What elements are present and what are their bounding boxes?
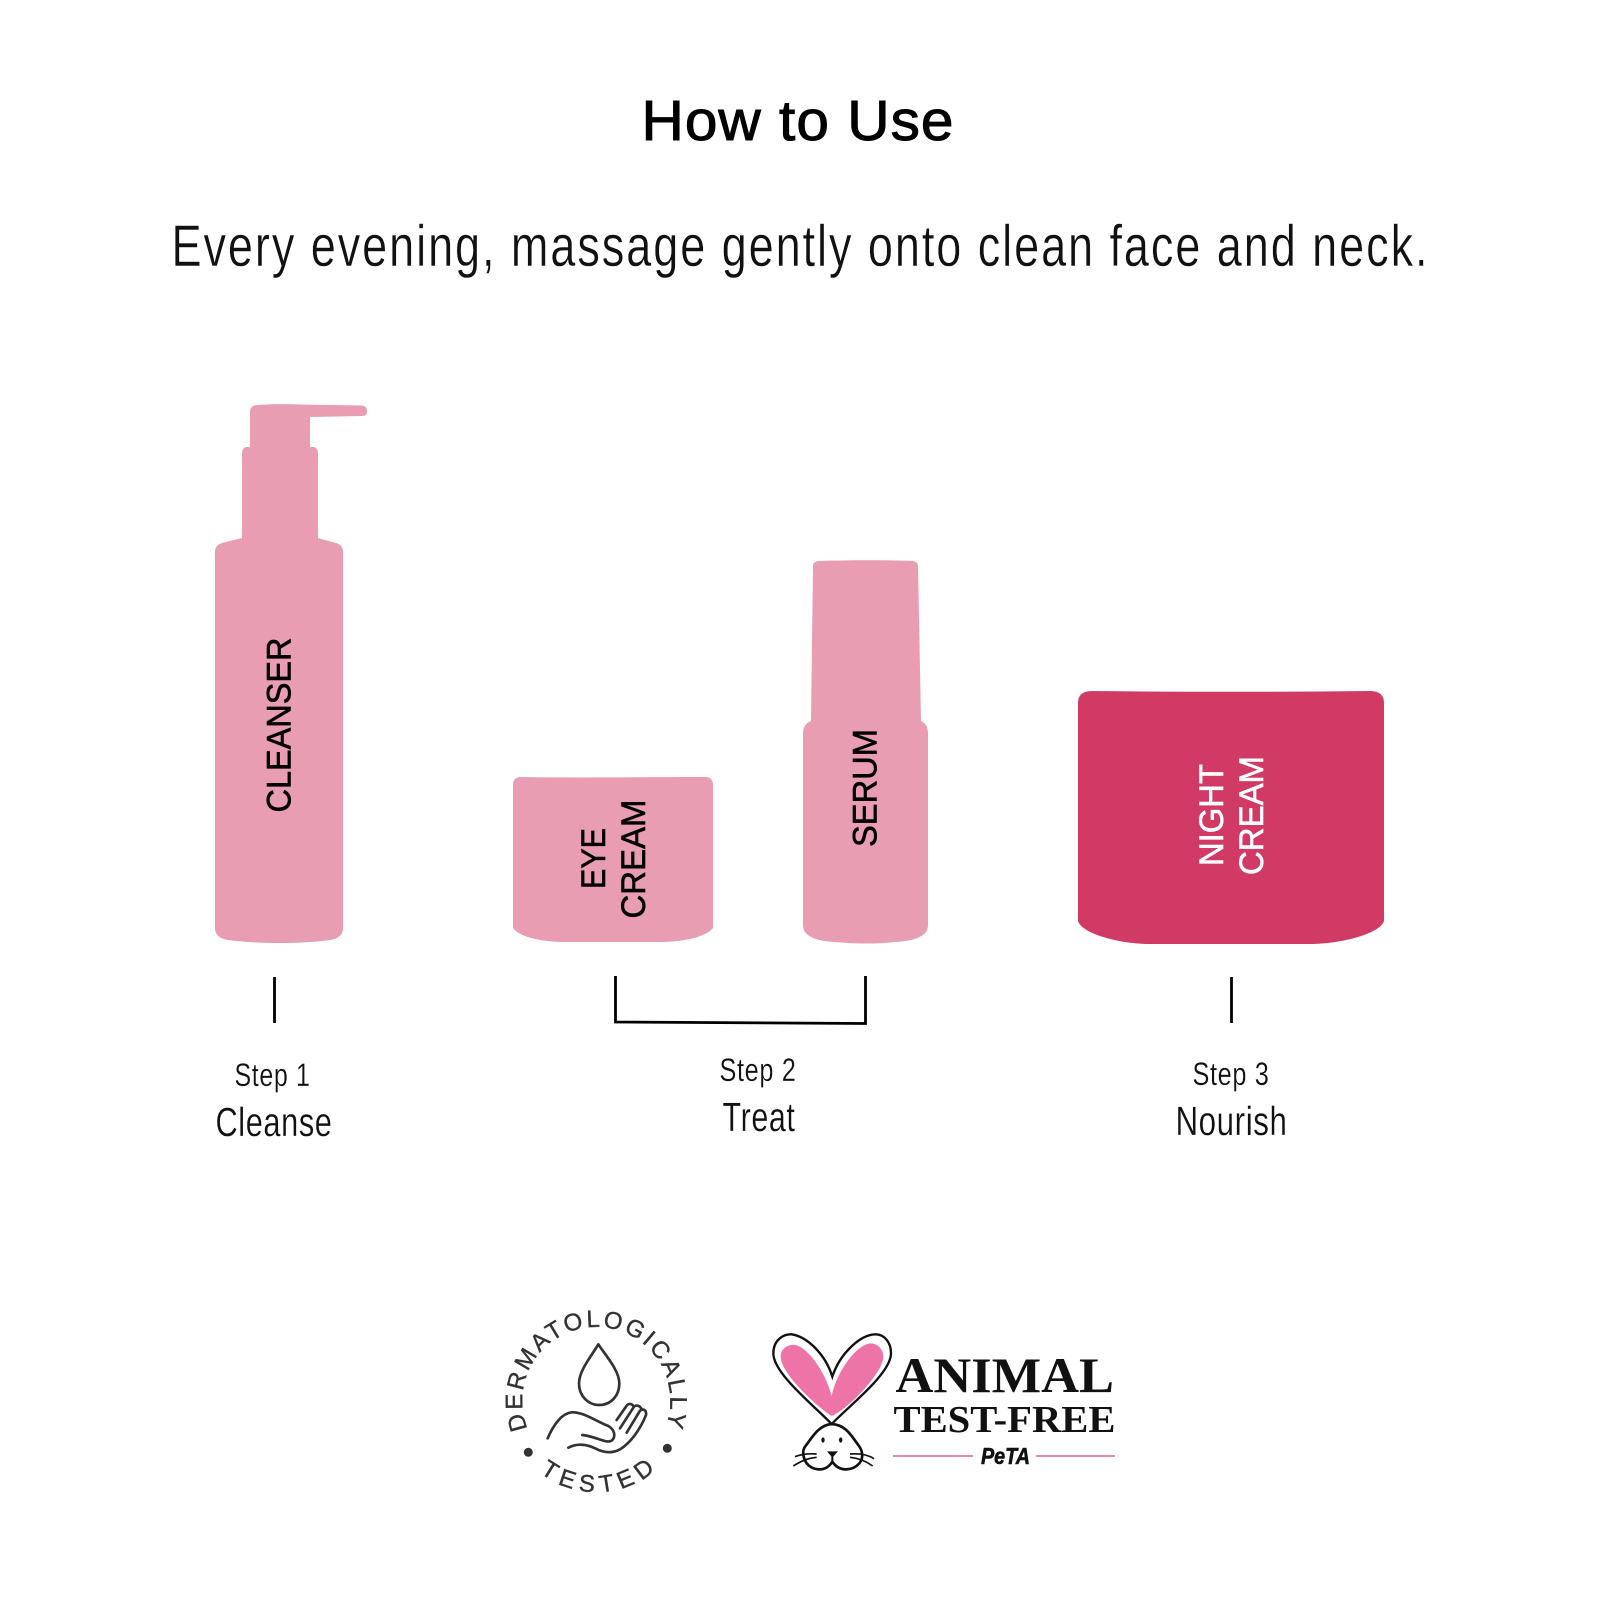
- product: eye cream jar: [513, 777, 713, 942]
- badge: dermatologically tested: [506, 1310, 688, 1492]
- badge: PETA animal test-free: [773, 1334, 1116, 1469]
- label: step 1 cleanse: Step 1: [234, 1057, 310, 1093]
- product: night cream jar: [1078, 691, 1384, 944]
- icon: bunny heart ears: [773, 1334, 891, 1469]
- badge: dermatologically tested: TESTED: [544, 1459, 652, 1492]
- product: cleanser bottle: CLEANSER: [260, 638, 298, 812]
- label: step 1 cleanse: [216, 1057, 332, 1145]
- label: step 1 cleanse: Cleanse: [216, 1099, 332, 1145]
- product: cleanser bottle: [215, 404, 367, 943]
- badge: PETA animal test-free: ANIMAL: [896, 1347, 1114, 1403]
- product: serum bottle: SERUM: [846, 729, 884, 847]
- product: night cream jar: NIGHT: [1193, 764, 1231, 866]
- label: step 2 treat: Treat: [722, 1094, 796, 1140]
- icon: water drop and hand: [548, 1344, 646, 1452]
- badge: PETA animal test-free: PeTA: [981, 1443, 1030, 1469]
- connector: step 3: [1230, 977, 1233, 1023]
- label: step 2 treat: [720, 1052, 796, 1140]
- connector: step 1: [273, 977, 276, 1023]
- label: step 3 nourish: Step 3: [1192, 1056, 1270, 1092]
- product: eye cream jar: EYE: [575, 828, 613, 889]
- product: eye cream jar: CREAM: [615, 800, 653, 918]
- badge: dermatologically tested: DERMATOLOGICALLY: [506, 1310, 688, 1432]
- label: step 2 treat: Step 2: [720, 1052, 796, 1088]
- badge: PETA animal test-free: TEST-FREE: [894, 1399, 1116, 1441]
- product: serum bottle: [803, 560, 928, 944]
- product: night cream jar: CREAM: [1233, 756, 1271, 875]
- label: step 3 nourish: [1176, 1056, 1288, 1144]
- connector: step 2 bracket: [616, 976, 866, 1024]
- label: step 3 nourish: Nourish: [1176, 1098, 1288, 1144]
- title: How to Use: [642, 89, 954, 153]
